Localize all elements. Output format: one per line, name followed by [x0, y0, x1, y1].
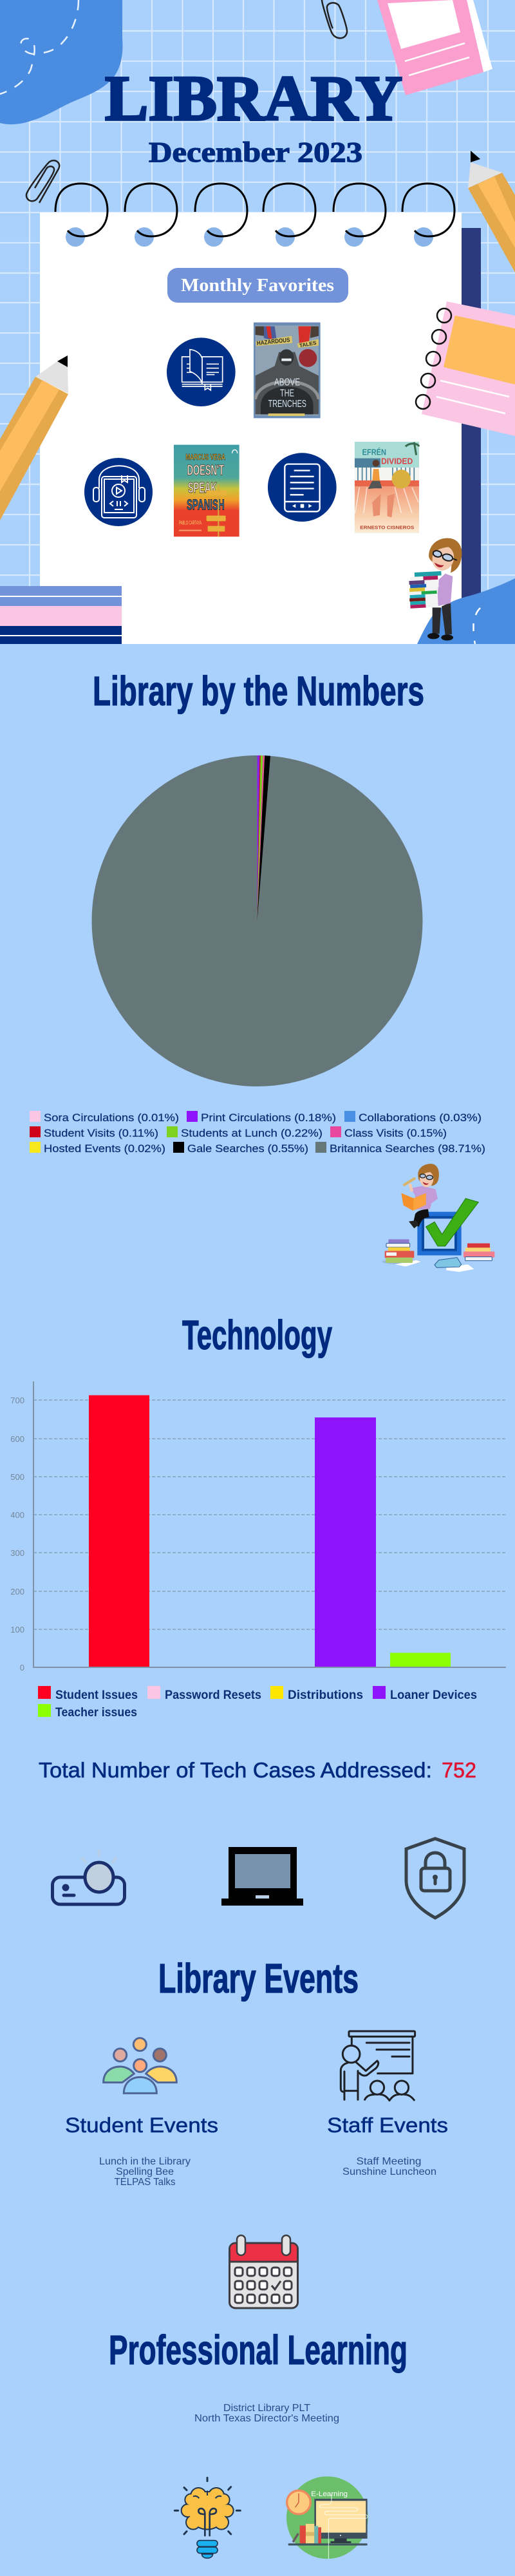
pink book: top right — [377, 0, 492, 95]
pie chart legend: Gale Searches (0.55%) — [187, 1142, 308, 1155]
list: student events: Spelling Bee — [116, 2166, 174, 2177]
book cover: Marcus Vega Doesn't Speak Spanish — [174, 445, 239, 536]
badge: Monthly Favorites: Monthly Favorites — [181, 276, 334, 296]
book cover: Above the Trenches: HAZARDOUS — [256, 337, 290, 346]
bar chart: technology: 700 — [10, 1396, 24, 1405]
pencil: right — [468, 151, 515, 272]
list: professional learning — [194, 2403, 339, 2424]
bar chart legend — [38, 1686, 477, 1719]
book cover: Marcus Vega Doesn't Speak Spanish: MARCUS VEGA — [185, 452, 225, 462]
list: staff events: Sunshine Luncheon — [342, 2166, 436, 2177]
book cover: Efren Divided: DIVIDED — [381, 457, 413, 466]
decorative blob: top left — [0, 0, 122, 124]
bar chart: technology: 500 — [10, 1472, 24, 1482]
book cover: Efren Divided — [355, 442, 419, 533]
icon: brain lightbulb — [174, 2477, 240, 2558]
icon: audiobook circle — [84, 458, 153, 526]
bar chart legend: Teacher issues — [55, 1706, 137, 1719]
heading: Technology: Technology — [182, 1312, 332, 1358]
stat: total tech cases: Total Number of Tech Cases Addressed: — [39, 1758, 432, 1782]
subheading: Staff Events: Staff Events — [327, 2114, 448, 2137]
icon: e-learning: E-Learning — [311, 2490, 348, 2498]
pie chart legend: Sora Circulations (0.01%) — [44, 1112, 179, 1124]
bar chart: technology: 300 — [10, 1548, 24, 1558]
icon: calendar — [229, 2235, 297, 2308]
pencil: left — [0, 355, 68, 520]
bar chart legend: Password Resets — [165, 1689, 261, 1702]
pie chart legend: Hosted Events (0.02%) — [44, 1142, 165, 1155]
icon: laptop — [221, 1847, 303, 1906]
book cover: Above the Trenches: TALES — [299, 340, 317, 348]
title: LIBRARY — [105, 62, 402, 134]
book cover: Above the Trenches: ABOVE — [274, 377, 300, 388]
icon: staff presentation — [341, 2031, 415, 2101]
bar chart legend: Distributions — [288, 1689, 363, 1702]
pie chart legend: Print Circulations (0.18%) — [201, 1112, 336, 1124]
spiral rings — [55, 184, 454, 236]
icon: student group — [104, 2038, 176, 2093]
pie chart legend — [30, 1111, 485, 1155]
book cover: Efren Divided: ERNESTO CISNEROS — [360, 524, 414, 530]
bar chart: technology: 100 — [10, 1625, 24, 1634]
icon: open book circle — [167, 337, 236, 406]
book cover: Above the Trenches: THE — [280, 388, 294, 399]
notebook panel — [40, 213, 481, 644]
list: staff events: Staff Meeting — [357, 2156, 421, 2167]
book cover: Marcus Vega Doesn't Speak Spanish: SPANISH — [187, 496, 225, 513]
pie chart legend: Students at Lunch (0.22%) — [181, 1127, 323, 1139]
book cover: Marcus Vega Doesn't Speak Spanish: DOESN'T — [187, 462, 224, 478]
bar chart: technology — [10, 1381, 506, 1672]
bitmoji: reader on checkbox — [382, 1164, 494, 1272]
stat: total tech cases: 752 — [442, 1758, 476, 1782]
pie chart legend: Collaborations (0.03%) — [359, 1112, 482, 1124]
paperclip: top — [322, 0, 347, 38]
bar chart: technology: 200 — [10, 1587, 24, 1596]
bar chart legend: Loaner Devices — [390, 1689, 477, 1702]
bitmoji: librarian holding books — [408, 538, 462, 641]
notebook holes — [66, 227, 433, 247]
list: staff events — [342, 2156, 436, 2177]
list: student events: TELPAS Talks — [115, 2177, 175, 2188]
subtitle: date: December 2023 — [149, 137, 362, 168]
book cover: Marcus Vega Doesn't Speak Spanish: SPEAK — [188, 479, 217, 496]
subheading: Student Events: Student Events — [65, 2114, 218, 2137]
pie chart legend: Britannica Searches (98.71%) — [330, 1142, 485, 1155]
book cover: Marcus Vega Doesn't Speak Spanish: PABLO CARTAYA — [179, 520, 201, 526]
icon: e-learning — [286, 2476, 368, 2559]
heading: Library Events: Library Events — [158, 1955, 359, 2002]
bar chart legend: Student Issues — [55, 1689, 138, 1702]
decorative blob: bottom right — [417, 578, 515, 644]
pie chart legend: Student Visits (0.11%) — [44, 1127, 158, 1139]
bar chart: technology: 400 — [10, 1510, 24, 1520]
pie chart — [91, 755, 422, 1086]
pie chart legend: Class Visits (0.15%) — [344, 1127, 447, 1139]
list: professional learning: North Texas Director's Meeting — [194, 2413, 339, 2424]
list: professional learning: District Library PLT — [223, 2403, 310, 2414]
list: student events: Lunch in the Library — [99, 2156, 191, 2167]
list: student events — [99, 2156, 191, 2188]
book cover: Efren Divided: EFRÉN — [362, 448, 386, 457]
paperclip: left — [26, 160, 59, 203]
bar chart: technology: 600 — [10, 1434, 24, 1444]
icon: e-reader circle — [268, 453, 337, 522]
stripes: bottom left — [0, 586, 122, 644]
book cover: Above the Trenches: TRENCHES — [268, 399, 306, 410]
icon: projector — [53, 1850, 125, 1904]
pink notepad: right — [416, 301, 515, 436]
book cover: Above the Trenches — [254, 323, 321, 418]
bar chart: technology: 0 — [20, 1663, 24, 1672]
icon: security shield — [406, 1839, 464, 1918]
badge: Monthly Favorites — [167, 268, 348, 303]
